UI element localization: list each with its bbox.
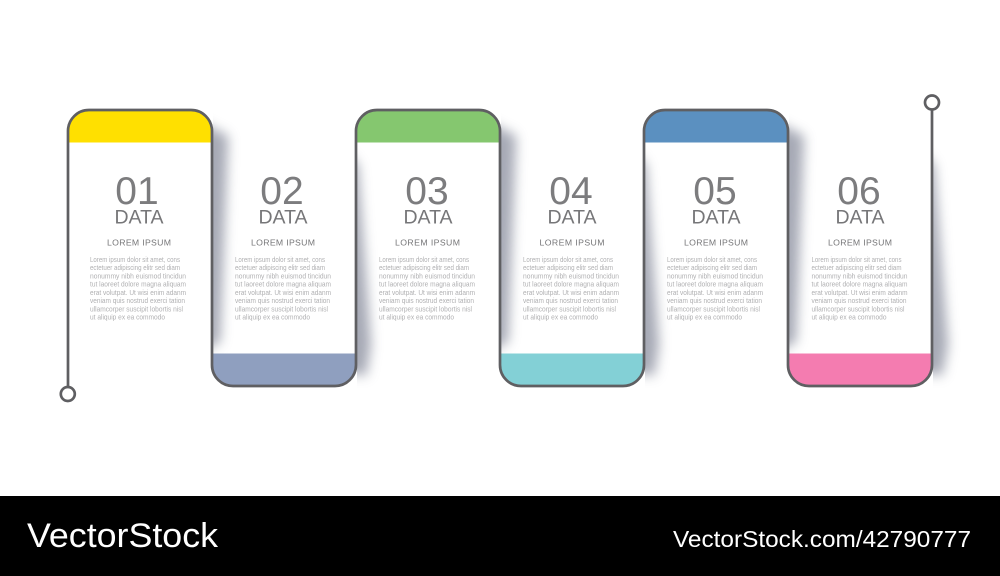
step 03 text: DATA [403,206,453,228]
step 05 text: ectetuer adipiscing elitr sed diam [667,263,757,272]
band: 04 teal [500,354,644,386]
footer bar [0,496,1000,576]
step 05 text: erat volutpat. Ut wisi enim adanm [667,288,763,297]
step 03 text: tut laoreet dolore magna aliquam [379,280,475,289]
step 06 text: LOREM IPSUM [828,238,892,248]
step 05 text: DATA [691,206,741,228]
step 02 text: tut laoreet dolore magna aliquam [235,280,331,289]
step 06 text: Lorem ipsum dolor sit amet, cons [812,255,902,264]
band: 02 slate blue [212,354,356,386]
step 04 text: 04 [549,170,593,213]
step 02 text: DATA [258,206,308,228]
step 05 text: Lorem ipsum dolor sit amet, cons [667,255,757,264]
start node circle [61,387,75,401]
step 03 text: 03 [405,170,449,213]
step 06 text: nonummy nibh euismod tincidun [812,271,908,280]
step 04 text: erat volutpat. Ut wisi enim adanm [523,288,619,297]
band: 03 green [356,110,500,142]
step 06 text: erat volutpat. Ut wisi enim adanm [812,288,908,297]
step 05 text: ullamcorper suscipit lobortis nisl [667,304,760,313]
step 06 text [812,170,908,322]
step 02 text: ut aliquip ex ea commodo [235,313,310,322]
step 01 text: veniam quis nostrud exerci tation [90,296,185,305]
step 03 text: LOREM IPSUM [395,238,460,248]
step 03 text: ut aliquip ex ea commodo [379,313,454,322]
step 02 text: 02 [260,170,304,213]
step 06 text: ut aliquip ex ea commodo [812,313,887,322]
step 03 text: Lorem ipsum dolor sit amet, cons [379,255,469,264]
step 02 text: veniam quis nostrud exerci tation [235,296,330,305]
step 05 text: nonummy nibh euismod tincidun [667,271,763,280]
footer url text: VectorStock.com/42790777 [673,526,971,552]
step 02 text: Lorem ipsum dolor sit amet, cons [235,255,325,264]
step 02 text [235,170,331,322]
step 04 text: nonummy nibh euismod tincidun [523,271,619,280]
step 02 text: ectetuer adipiscing elitr sed diam [235,263,325,272]
step 01 text [90,170,186,322]
step 04 text: ut aliquip ex ea commodo [523,313,598,322]
step 01 text: erat volutpat. Ut wisi enim adanm [90,288,186,297]
step 04 text [523,170,619,322]
step 01 text: ullamcorper suscipit lobortis nisl [90,304,183,313]
step 06 text: tut laoreet dolore magna aliquam [812,280,908,289]
step 02 text: LOREM IPSUM [251,238,315,248]
step 01 text: nonummy nibh euismod tincidun [90,271,186,280]
end node circle [925,96,939,110]
step 04 text: LOREM IPSUM [540,238,604,248]
step 01 text: Lorem ipsum dolor sit amet, cons [90,255,180,264]
step 04 text: ectetuer adipiscing elitr sed diam [523,263,613,272]
step 03 text [379,170,475,322]
step 06 text: ullamcorper suscipit lobortis nisl [812,304,905,313]
step 03 text: ullamcorper suscipit lobortis nisl [379,304,472,313]
step 04 text: DATA [547,206,597,228]
step 01 text: ut aliquip ex ea commodo [90,313,165,322]
step 04 text: Lorem ipsum dolor sit amet, cons [523,255,613,264]
step 05 text: veniam quis nostrud exerci tation [667,296,762,305]
step 04 text: veniam quis nostrud exerci tation [523,296,618,305]
step 02 text: nonummy nibh euismod tincidun [235,271,331,280]
step 05 text: tut laoreet dolore magna aliquam [667,280,763,289]
band: 05 blue [644,110,788,142]
step 06 text: DATA [835,206,885,228]
step 05 text [667,170,763,322]
ribbon outline [68,110,932,386]
step 03 text: nonummy nibh euismod tincidun [379,271,475,280]
step 06 text: 06 [837,170,881,213]
step 01 text: 01 [115,170,159,213]
step 02 text: erat volutpat. Ut wisi enim adanm [235,288,331,297]
step 06 text: veniam quis nostrud exerci tation [812,296,906,305]
step 01 text: LOREM IPSUM [107,238,171,248]
band: 01 yellow [68,110,212,142]
step 01 text: DATA [114,206,164,228]
band: 06 pink [788,354,932,386]
step 04 text: tut laoreet dolore magna aliquam [523,280,619,289]
step 06 text: ectetuer adipiscing elitr sed diam [812,263,902,272]
step 03 text: ectetuer adipiscing elitr sed diam [379,263,469,272]
step 01 text: tut laoreet dolore magna aliquam [90,280,186,289]
step 05 text: 05 [693,170,737,213]
step 05 text: LOREM IPSUM [684,238,748,248]
step 01 text: ectetuer adipiscing elitr sed diam [90,263,180,272]
step 03 text: erat volutpat. Ut wisi enim adanm [379,288,475,297]
shadows behind the ribbon [200,122,948,376]
step 03 text: veniam quis nostrud exerci tation [379,296,474,305]
footer logo text: VectorStock [27,517,219,555]
step 02 text: ullamcorper suscipit lobortis nisl [235,304,328,313]
step 05 text: ut aliquip ex ea commodo [667,313,742,322]
step 04 text: ullamcorper suscipit lobortis nisl [523,304,616,313]
